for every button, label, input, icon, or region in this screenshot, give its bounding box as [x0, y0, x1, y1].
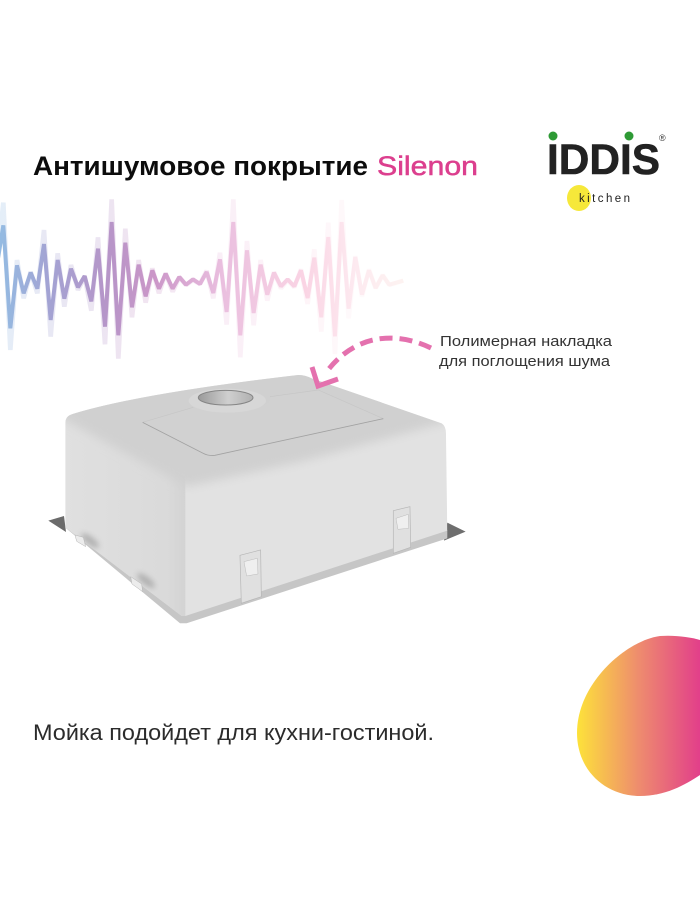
side tabs	[75, 535, 143, 592]
logo: IDDIS kitchen	[547, 132, 666, 211]
icon: yellow spot	[567, 185, 591, 211]
drain collar	[189, 389, 266, 413]
flange left	[48, 516, 66, 532]
callout text: Полимерная накладка	[440, 334, 613, 350]
shadows near clips	[79, 531, 157, 590]
body	[65, 375, 448, 616]
front face	[185, 420, 448, 616]
icon: green dots	[548, 132, 634, 140]
logo wordmark: IDDIS	[547, 136, 660, 184]
callout arrow	[312, 338, 431, 386]
clip left	[240, 550, 261, 603]
flange right	[444, 523, 466, 541]
drain hole	[198, 390, 253, 405]
wave: pale echo	[0, 199, 403, 359]
arrow: dashed curve	[325, 338, 431, 374]
registered mark: ®	[659, 133, 666, 143]
caption: Мойка подойдет для кухни-гостиной.	[33, 720, 434, 745]
wave: main line	[0, 222, 403, 336]
callout text: для поглощения шума	[439, 354, 611, 370]
gradient blob	[577, 636, 700, 796]
top face	[66, 375, 442, 486]
rim	[65, 525, 447, 623]
left face	[167, 483, 186, 616]
title	[33, 151, 478, 181]
arrow: head	[312, 367, 338, 386]
sound wave	[0, 199, 403, 359]
pad edge	[143, 419, 383, 455]
title: pink part: Silenon	[377, 151, 478, 181]
polymer pad	[143, 390, 383, 455]
sink	[48, 360, 466, 623]
title: dark part: Антишумовое покрытие	[33, 151, 368, 181]
pad top edge	[143, 390, 383, 422]
clip right	[393, 507, 411, 553]
logo subtitle: kitchen	[579, 193, 630, 205]
